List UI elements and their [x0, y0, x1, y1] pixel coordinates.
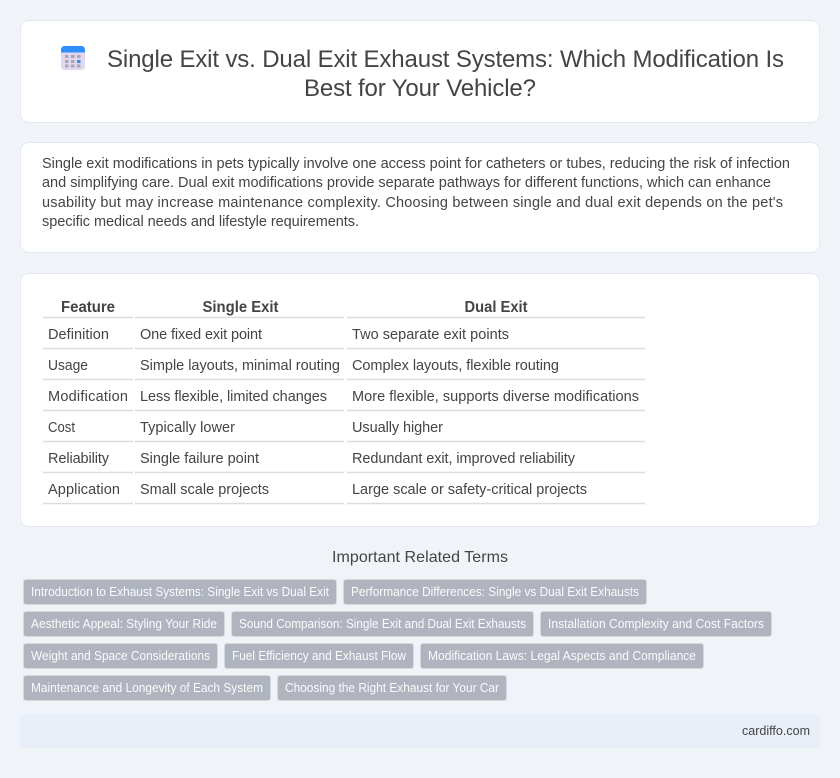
panel: summary	[20, 142, 820, 252]
tag: Modification Laws: Legal Aspects and Compliance	[428, 649, 696, 663]
text block: summary paragraph: usability but may increase maintenance complexity. Choosing between single and dual exit depends on the pet's	[42, 195, 783, 211]
table row: modification	[48, 389, 639, 405]
tag: Maintenance and Longevity of Each System	[31, 681, 263, 695]
table header	[61, 299, 528, 316]
tag	[540, 612, 772, 636]
heading: related terms: Important Related Terms	[332, 549, 508, 566]
table header: Single Exit	[202, 299, 278, 316]
tag	[278, 676, 506, 700]
table row: modification: Less flexible, limited changes	[140, 389, 327, 405]
tag: Weight and Space Considerations	[31, 649, 210, 663]
table header: Dual Exit	[464, 299, 528, 316]
tag	[24, 580, 336, 604]
footer: site name: cardiffo.com	[742, 724, 810, 738]
panel: comparison table	[20, 274, 820, 526]
title: Single Exit vs. Dual Exit Exhaust Systems: Which Modification Is	[107, 46, 784, 73]
table row: reliability	[48, 451, 576, 467]
tag	[232, 612, 534, 636]
table row: usage: Usage	[48, 358, 88, 374]
tag: Introduction to Exhaust Systems: Single Exit vs Dual Exit	[31, 585, 329, 599]
table row: usage: Complex layouts, flexible routing	[352, 358, 559, 374]
tag: Aesthetic Appeal: Styling Your Ride	[31, 617, 217, 631]
table row: definition: Two separate exit points	[352, 327, 509, 343]
tag: Sound Comparison: Single Exit and Dual Exit Exhausts	[239, 617, 526, 631]
tag	[24, 612, 224, 636]
tag	[344, 580, 646, 604]
tag: Performance Differences: Single vs Dual Exit Exhausts	[351, 585, 639, 599]
table row: reliability: Single failure point	[140, 451, 259, 467]
table row: usage: Simple layouts, minimal routing	[140, 358, 340, 374]
table row: cost: Typically lower	[140, 420, 235, 436]
panel: title header	[20, 20, 820, 122]
table row: application: Small scale projects	[140, 482, 269, 498]
table row: reliability: Reliability	[48, 451, 110, 467]
table rules	[43, 318, 645, 504]
table row: definition: Definition	[48, 327, 109, 343]
table row: application: Application	[48, 482, 120, 498]
text block: summary paragraph: specific medical needs and lifestyle requirements.	[42, 214, 359, 230]
table row: reliability: Redundant exit, improved reliability	[352, 451, 576, 467]
tag: Fuel Efficiency and Exhaust Flow	[232, 649, 407, 663]
title: Best for Your Vehicle?	[304, 75, 536, 102]
table row: usage	[48, 358, 559, 374]
table row: application	[48, 482, 587, 498]
tag: Installation Complexity and Cost Factors	[548, 617, 764, 631]
table row: modification: More flexible, supports diverse modifications	[352, 389, 639, 405]
tag: Choosing the Right Exhaust for Your Car	[285, 681, 499, 695]
footer bar	[20, 714, 820, 748]
tag	[224, 644, 414, 668]
table header: Feature	[61, 299, 115, 316]
table row: application: Large scale or safety-critical projects	[352, 482, 587, 498]
tag	[24, 676, 270, 700]
tag list: related terms	[24, 580, 772, 700]
icon: calendar	[61, 46, 85, 70]
text block: summary paragraph: Single exit modifications in pets typically involve one access point for catheters or tubes, reducing the risk of infection	[42, 156, 790, 172]
table row: modification: Modification	[48, 389, 128, 405]
text block: summary paragraph: and simplifying care. Dual exit modifications provide separate pathways for different functions, which can enhance	[42, 175, 771, 191]
title	[107, 46, 784, 102]
table row: definition	[48, 327, 509, 343]
tag	[420, 644, 704, 668]
text block: summary paragraph	[42, 156, 790, 230]
table row: definition: One fixed exit point	[140, 327, 262, 343]
table row: cost	[48, 420, 443, 436]
table row: cost: Cost	[48, 420, 75, 436]
tag	[24, 644, 218, 668]
table row: cost: Usually higher	[352, 420, 443, 436]
